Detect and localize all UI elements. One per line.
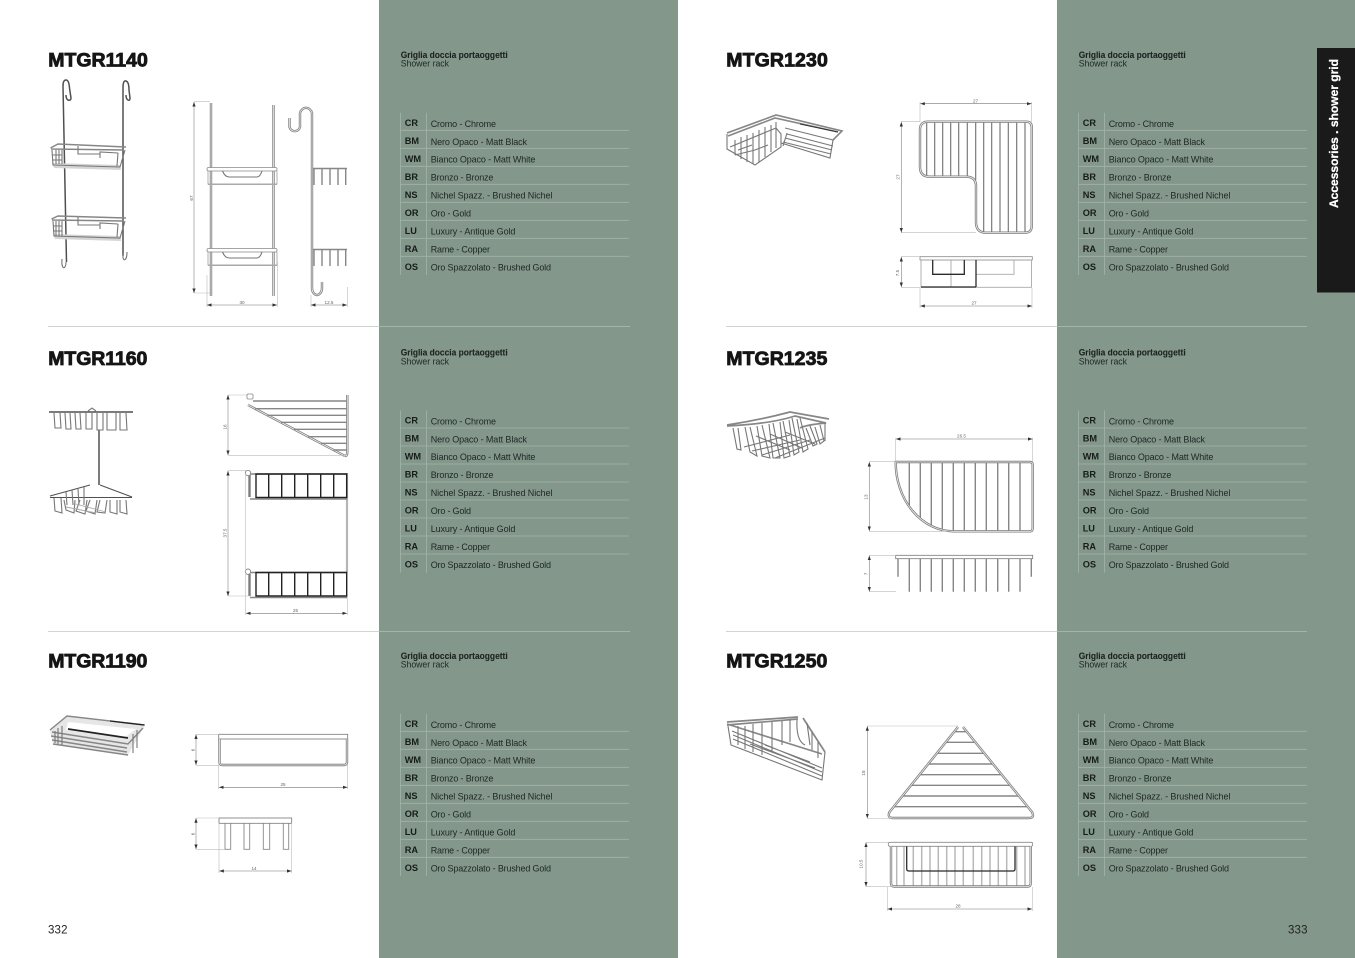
product info: MTGR1190: LU [405,827,417,837]
drawing: MTGR1235 side view: 7 [864,572,868,575]
product info: MTGR1230: Bronzo - Bronze [1109,172,1171,182]
product info: MTGR1140: BR [405,172,418,182]
product info: MTGR1235: Oro - Gold [1109,506,1149,516]
product info: MTGR1250: Luxury - Antique Gold [1109,827,1193,837]
title: MTGR1230: MTGR1230 [726,50,828,72]
product info: MTGR1140: Rame - Copper [431,244,490,254]
drawing: MTGR1235 top view: 26.5 [957,434,966,438]
drawing: MTGR1140 side view: 12.5 [325,300,334,305]
product info: MTGR1140: CR [405,118,418,128]
product info: MTGR1250: BR [1083,773,1096,783]
product info: MTGR1160: LU [405,524,417,534]
product info: MTGR1235: Cromo - Chrome [1109,417,1174,427]
product info: MTGR1140: Luxury - Antique Gold [431,226,515,236]
product photo: MTGR1230 [727,115,842,165]
product info: MTGR1160: Bianco Opaco - Matt White [431,452,535,462]
product info: MTGR1250: OR [1083,809,1097,819]
product info: MTGR1140: NS [405,190,417,200]
product info: MTGR1160: Nero Opaco - Matt Black [431,435,528,445]
drawing: MTGR1190 side view: 14 [251,866,257,871]
product info: MTGR1140: Shower rack [401,58,449,69]
product info: MTGR1190: OS [405,863,418,873]
drawing: MTGR1140 front view: 30 [239,300,245,305]
product info: MTGR1235: WM [1083,452,1099,462]
drawing: MTGR1230 front view: 27 [971,300,977,306]
drawing: MTGR1190 front view: 6 [190,748,196,751]
product info: MTGR1140: OR [405,208,419,218]
panel: left sage column [379,0,678,958]
drawing: MTGR1190 side view: 6 [190,832,196,835]
drawing: MTGR1160 top view [222,394,347,456]
product info: MTGR1230: Rame - Copper [1109,244,1168,254]
product info: MTGR1235: LU [1083,524,1095,534]
product info: MTGR1160: Oro Spazzolato - Brushed Gold [431,560,551,570]
page number 332: 332 [48,924,68,936]
drawing: MTGR1160 front view: 25 [293,608,298,613]
product info: MTGR1160: WM [405,452,421,462]
product info: MTGR1250: OS [1083,863,1096,873]
product info: MTGR1250: RA [1083,845,1096,855]
drawing: MTGR1230 front view [895,257,1032,308]
product info: MTGR1160: Rame - Copper [431,542,490,552]
product info: MTGR1140: Cromo - Chrome [431,119,496,129]
product info: MTGR1250: LU [1083,827,1095,837]
drawing: MTGR1250 front view: 10.5 [858,859,864,868]
product info: MTGR1140: Oro Spazzolato - Brushed Gold [431,262,551,272]
product info: MTGR1235: BR [1083,470,1096,480]
product info: MTGR1235: Bronzo - Bronze [1109,470,1171,480]
product info: MTGR1235: Nero Opaco - Matt Black [1109,435,1206,445]
product info: MTGR1235 [1078,347,1307,573]
drawing: MTGR1235 side view [864,555,1033,592]
product info: MTGR1160: OR [405,506,419,516]
product info: MTGR1190: CR [405,719,418,729]
product info: MTGR1250: CR [1083,719,1096,729]
product info: MTGR1230: Bianco Opaco - Matt White [1109,154,1213,164]
product info: MTGR1160: OS [405,560,418,570]
product info: MTGR1190: Oro - Gold [431,809,471,819]
drawing: MTGR1230 front view: 7.5 [895,269,900,276]
product info: MTGR1160 [400,347,629,573]
drawing: MTGR1190 side view [190,818,292,873]
product info: MTGR1250: Shower rack [1079,659,1127,670]
product info: MTGR1235: OR [1083,506,1097,516]
drawing: MTGR1140 front view: 67 [189,195,194,201]
product info: MTGR1235: Griglia doccia portaoggetti [1079,347,1186,358]
product info: MTGR1190: Rame - Copper [431,845,490,855]
product info: MTGR1230: NS [1083,190,1095,200]
product info: MTGR1190: Bianco Opaco - Matt White [431,755,535,765]
product info: MTGR1140: LU [405,226,417,236]
product info: MTGR1230: BM [1083,136,1097,146]
product info: MTGR1190 [400,650,629,876]
product info: MTGR1250: NS [1083,791,1095,801]
product info: MTGR1230: BR [1083,172,1096,182]
drawing: MTGR1140 front view [189,102,278,307]
product info: MTGR1140: RA [405,244,418,254]
drawing: MTGR1250 front view [858,842,1033,911]
side tab: section label [1317,48,1355,292]
product info: MTGR1250: Nichel Spazz. - Brushed Nichel [1109,791,1230,801]
product info: MTGR1235: Shower rack [1079,355,1127,366]
product info: MTGR1230: Luxury - Antique Gold [1109,226,1193,236]
drawing: MTGR1230 top view: 27 [896,174,900,180]
product info: MTGR1160: Oro - Gold [431,506,471,516]
product info: MTGR1190: OR [405,809,419,819]
product info: MTGR1160: Griglia doccia portaoggetti [401,347,508,358]
product info: MTGR1250: WM [1083,755,1099,765]
title: MTGR1140: MTGR1140 [48,50,148,72]
drawing: MTGR1140 side view [290,108,348,307]
product info: MTGR1190: Luxury - Antique Gold [431,827,515,837]
product info: MTGR1140: Oro - Gold [431,208,471,218]
product info: MTGR1190: WM [405,755,421,765]
product info: MTGR1235: Luxury - Antique Gold [1109,524,1193,534]
product info: MTGR1230: Nichel Spazz. - Brushed Nichel [1109,190,1230,200]
product info: MTGR1235: RA [1083,542,1096,552]
drawing: MTGR1250 front view: 28 [955,904,961,908]
product info: MTGR1250: Oro Spazzolato - Brushed Gold [1109,863,1229,873]
product info: MTGR1230: WM [1083,154,1099,164]
product info: MTGR1190: NS [405,791,417,801]
drawing: MTGR1160 front view: 37.5 [222,528,228,537]
title: MTGR1160: MTGR1160 [48,348,147,370]
drawing: MTGR1230 top view: 27 [973,98,978,104]
product info: MTGR1230: OS [1083,262,1096,272]
product info: MTGR1250 [1078,650,1307,876]
product info: MTGR1250: Bronzo - Bronze [1109,773,1171,783]
drawing: MTGR1160 front view [222,470,348,615]
product info: MTGR1190: Oro Spazzolato - Brushed Gold [431,863,551,873]
product photo: MTGR1250 [727,717,825,780]
page number 333: 333 [1288,924,1308,936]
product info: MTGR1235: Bianco Opaco - Matt White [1109,452,1213,462]
product info: MTGR1160: RA [405,542,418,552]
product photo: MTGR1235 [727,412,829,458]
product info: MTGR1235: BM [1083,434,1097,444]
product info: MTGR1250: Nero Opaco - Matt Black [1109,738,1206,748]
product info: MTGR1230: LU [1083,226,1095,236]
product info: MTGR1190: Shower rack [401,659,449,670]
drawing: MTGR1235 top view: 13 [864,494,868,500]
product info: MTGR1230 [1078,49,1307,275]
drawing: MTGR1190 front view: 25 [280,782,286,787]
product info: MTGR1230: CR [1083,118,1096,128]
product info: MTGR1235: CR [1083,416,1096,426]
product info: MTGR1160: NS [405,488,417,498]
product info: MTGR1140: Bianco Opaco - Matt White [431,154,535,164]
drawing: MTGR1250 top view: 18 [861,770,866,776]
product info: MTGR1250: Cromo - Chrome [1109,720,1174,730]
product info: MTGR1230: Cromo - Chrome [1109,119,1174,129]
title: MTGR1250: MTGR1250 [726,651,827,673]
product info: MTGR1235: NS [1083,488,1095,498]
product info: MTGR1250: Griglia doccia portaoggetti [1079,650,1186,661]
drawing: MTGR1250 top view [861,726,1033,818]
product info: MTGR1140 [400,49,629,275]
product info: MTGR1140: Nero Opaco - Matt Black [431,137,528,147]
drawing: MTGR1190 front view [190,734,348,789]
product info: MTGR1140: Griglia doccia portaoggetti [401,49,508,60]
product info: MTGR1140: OS [405,262,418,272]
product info: MTGR1230: OR [1083,208,1097,218]
product info: MTGR1230: Oro - Gold [1109,208,1149,218]
product info: MTGR1140: Bronzo - Bronze [431,172,493,182]
drawing: MTGR1235 top view [864,434,1033,531]
product info: MTGR1140: Nichel Spazz. - Brushed Nichel [431,190,552,200]
product info: MTGR1235: OS [1083,560,1096,570]
product info: MTGR1160: Nichel Spazz. - Brushed Nichel [431,488,552,498]
product info: MTGR1190: Nero Opaco - Matt Black [431,738,528,748]
product info: MTGR1190: BR [405,773,418,783]
product info: MTGR1190: Bronzo - Bronze [431,773,493,783]
product info: MTGR1235: Oro Spazzolato - Brushed Gold [1109,560,1229,570]
product info: MTGR1160: Bronzo - Bronze [431,470,493,480]
product info: MTGR1190: Cromo - Chrome [431,720,496,730]
product info: MTGR1250: Bianco Opaco - Matt White [1109,755,1213,765]
drawing: MTGR1230 top view [896,98,1032,233]
product info: MTGR1235: Nichel Spazz. - Brushed Nichel [1109,488,1230,498]
side tab: section label: Accessories . shower grid [1329,59,1341,208]
product info: MTGR1230: Shower rack [1079,58,1127,69]
product info: MTGR1160: Shower rack [401,355,449,366]
product info: MTGR1250: BM [1083,737,1097,747]
product photo: MTGR1160 [49,408,133,514]
product info: MTGR1230: Griglia doccia portaoggetti [1079,49,1186,60]
product info: MTGR1250: Rame - Copper [1109,845,1168,855]
product info: MTGR1235: Rame - Copper [1109,542,1168,552]
product info: MTGR1190: Nichel Spazz. - Brushed Nichel [431,791,552,801]
product info: MTGR1230: Oro Spazzolato - Brushed Gold [1109,262,1229,272]
title: MTGR1190: MTGR1190 [48,651,147,673]
product info: MTGR1230: Nero Opaco - Matt Black [1109,137,1206,147]
product info: MTGR1190: Griglia doccia portaoggetti [401,650,508,661]
panel: right sage column [1057,0,1355,958]
product info: MTGR1160: BM [405,434,419,444]
product info: MTGR1230: RA [1083,244,1096,254]
product info: MTGR1160: BR [405,470,418,480]
product info: MTGR1190: RA [405,845,418,855]
product photo: MTGR1190 [50,716,145,755]
product info: MTGR1190: BM [405,737,419,747]
drawing: MTGR1160 top view: 16 [222,424,228,430]
product info: MTGR1140: BM [405,136,419,146]
product info: MTGR1160: Luxury - Antique Gold [431,524,515,534]
product info: MTGR1250: Oro - Gold [1109,809,1149,819]
product info: MTGR1160: CR [405,416,418,426]
product info: MTGR1140: WM [405,154,421,164]
product photo: MTGR1140 [50,80,130,268]
product info: MTGR1160: Cromo - Chrome [431,417,496,427]
title: MTGR1235: MTGR1235 [726,348,827,370]
